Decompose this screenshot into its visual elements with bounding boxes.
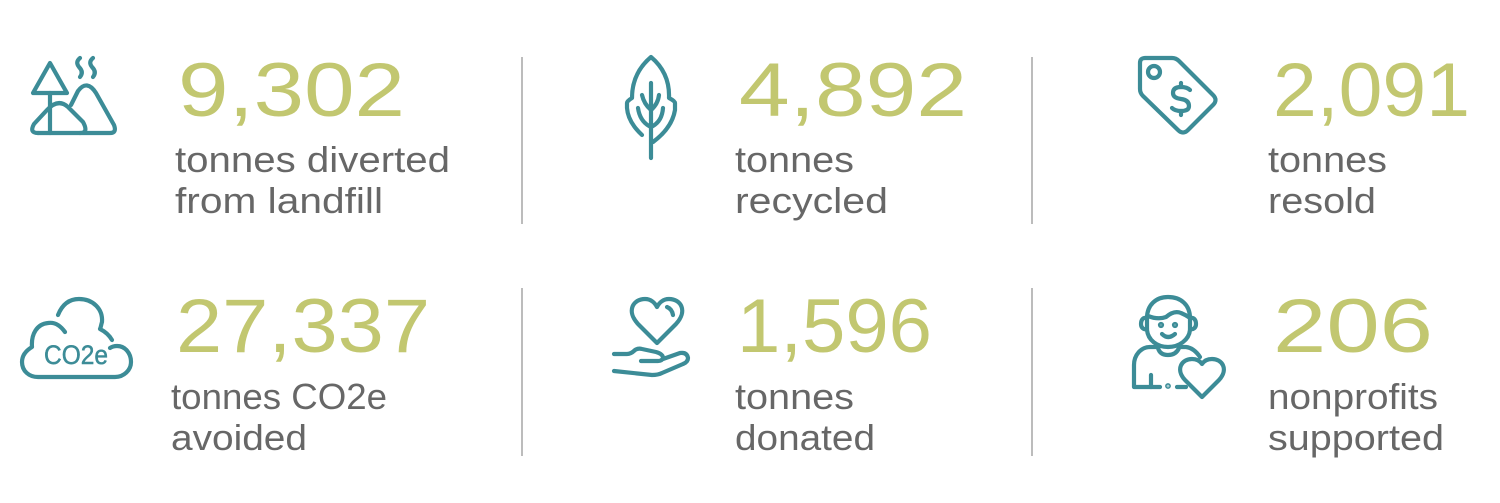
stat label: avoided xyxy=(171,417,307,458)
stat label xyxy=(171,376,387,458)
stat label: recycled xyxy=(735,180,888,221)
stat label: resold xyxy=(1268,180,1376,221)
stat label: tonnes xyxy=(1268,139,1387,180)
stat number: 27,337 xyxy=(176,284,430,369)
icon: person with heart xyxy=(1134,297,1224,397)
stat label: supported xyxy=(1268,417,1444,458)
stat number: 4,892 xyxy=(739,48,967,133)
stat label xyxy=(735,376,875,458)
panel: tonnes donated xyxy=(614,284,932,458)
stat label: tonnes CO2e xyxy=(171,376,387,417)
stat number: 1,596 xyxy=(737,284,932,369)
stat number: 206 xyxy=(1273,284,1433,369)
stat label xyxy=(1268,139,1387,221)
stat number: 9,302 xyxy=(178,48,405,133)
stat label xyxy=(175,139,450,221)
stat label: tonnes xyxy=(735,139,854,180)
icon: CO2e cloud xyxy=(22,299,131,377)
stat label xyxy=(1268,376,1444,458)
icon: price tag xyxy=(1140,58,1216,132)
stat label: tonnes diverted xyxy=(175,139,450,180)
icon: CO2e cloud: CO2e xyxy=(44,340,108,370)
stat number: 2,091 xyxy=(1273,48,1470,133)
panel: nonprofits supported xyxy=(1134,284,1444,458)
icon: tree, mountains and fumes xyxy=(32,58,115,133)
stat label: nonprofits xyxy=(1268,376,1438,417)
panel: tonnes diverted from landfill xyxy=(32,48,450,221)
stat label xyxy=(735,139,888,221)
panel: tonnes CO2e avoided xyxy=(22,284,430,458)
stat label: from landfill xyxy=(175,180,383,221)
stat label: donated xyxy=(735,417,875,458)
icon: leaf xyxy=(627,57,675,158)
stat label: tonnes xyxy=(735,376,854,417)
panel: tonnes recycled xyxy=(627,48,967,221)
icon: heart over open hand xyxy=(614,299,688,375)
panel: tonnes resold xyxy=(1140,48,1470,221)
